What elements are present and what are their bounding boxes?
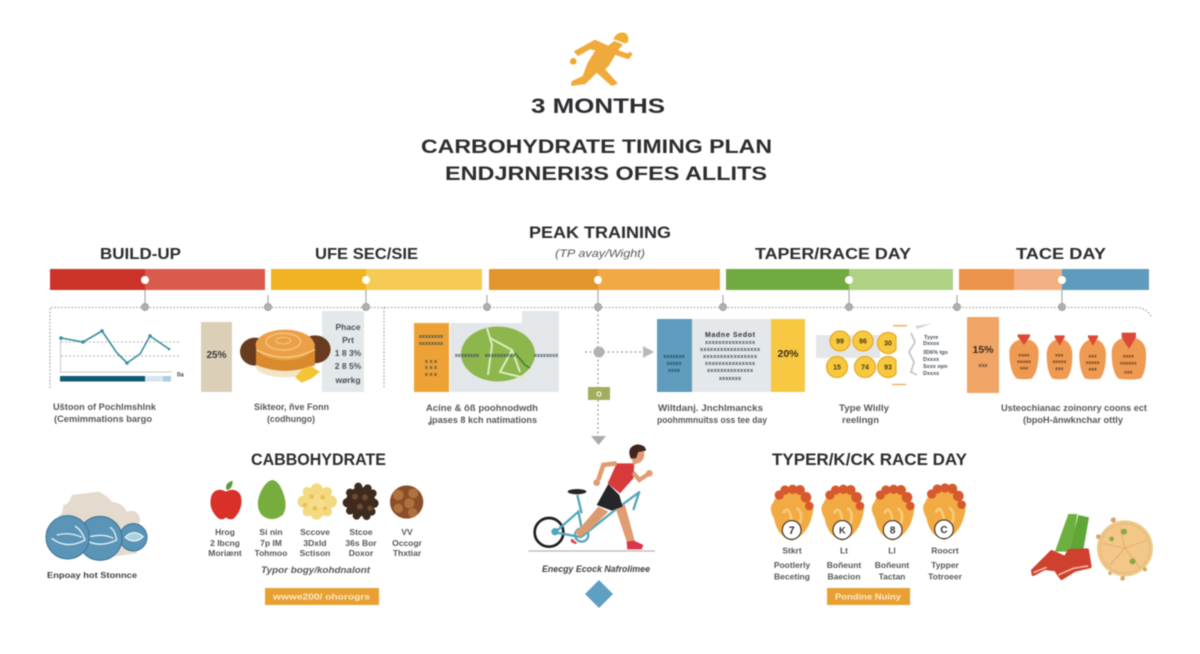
icon: coins: 99 [836,338,844,346]
panel: 20 percent: xxxx [668,368,681,374]
icon: coins: 3D6% tgs [923,350,948,356]
panel: 20 percent: Madne Sedot [705,332,756,339]
badge labels: Lt [840,546,848,556]
panel: peak training plate: xxxxxxxx [419,341,444,347]
icon: coins: Dxxxx [923,371,940,377]
panel: peak training plate [414,311,559,392]
line chart: 0a [177,372,184,378]
panel: 20 percent: xxxxxxx [719,376,742,382]
icon: brown nuts [390,485,423,519]
title: 3 months: 3 MONTHS [531,95,665,118]
icon: gel bottles: xxx [1020,365,1028,371]
icon: gel bottles: xxxxx [1086,360,1100,366]
caption: second phase: (codhungo) [267,414,315,425]
button: carbohydrate: wwwe200/ ohorogrs [272,592,370,602]
caption: taper: Wiltdanj. Jnchlmancks [658,403,763,414]
title: carbohydrate timing plan: CARBOHYDRATE TIMING PLAN [421,136,772,158]
caption: peak training: ʝpases 8 kch natimations [428,415,537,426]
panel: 20 percent: xxxxx [666,361,683,367]
badge: 8: 8 [890,526,896,537]
food labels: 36s Bor [345,538,377,548]
food labels: 2 Ibcng [210,538,240,548]
panel: peak training plate: x x x [425,372,438,378]
panel: 20 percent [657,319,805,392]
food labels [208,527,423,558]
badge labels: Tactan [879,572,905,582]
badge: C [923,483,966,540]
panel: 15 percent: 15% [972,344,994,356]
icon: runner with bicycle [528,444,655,551]
badge labels: Typper [931,560,960,570]
panel: 20 percent: xxxxxxxxxxxxxxxxxx [700,347,761,353]
icon: gel bottles: xxx [1088,367,1097,373]
flow arrows: O [596,392,602,398]
caption: peak training [426,403,538,426]
panel: phase details: wørkg [334,375,361,385]
caption: blue discs: Enpoay hot Stonnce [47,570,137,580]
timeline connectors and nodes [50,290,1151,388]
badge labels: Ll [888,546,896,556]
badge: 8 [872,485,915,541]
icon: coins: 15 [833,364,841,372]
caption: taper [657,403,768,426]
phase heading: peak training: PEAK TRAINING [529,224,671,242]
panel: peak training plate: x x x [425,359,438,365]
food labels: Thxtiar [393,548,422,558]
food labels: Doxor [349,548,374,558]
line chart [59,329,184,382]
badge labels: Boñeunt [827,560,861,570]
badge labels: Boñeunt [875,560,909,570]
badge: 7 [771,485,814,541]
caption: race day [1001,403,1148,426]
food labels: 7p IM [260,538,282,548]
caption: race day: Usteochianac zoinonry coons ect [1001,403,1148,414]
phase heading: second phase: UFE SEC/SIE [315,246,418,263]
food labels: Tohmoo [255,548,287,558]
panel: phase details [322,311,364,392]
phase heading: build-up: BUILD-UP [100,246,181,263]
panel: phase details: 1 8 3% [335,348,362,358]
icon: gel bottles: xxx [1088,353,1097,359]
panel: peak training plate: xxxxxxxx [455,353,480,359]
badge labels: Baecion [827,572,861,582]
badge: K [821,485,864,541]
panel: peak training plate: xxxxxxxx [534,353,559,359]
icon: blue diamond [585,580,613,608]
badge: K: K [839,525,846,535]
caption: runner: Enecgy Ecock Nafrolimee [542,564,650,574]
caption: second phase [254,402,329,425]
caption: build-up [53,402,157,425]
badge labels [774,546,963,582]
phase heading: race day: TACE DAY [1016,246,1107,263]
food icons [210,480,423,520]
timeline bar [50,269,1149,290]
icon: coins: Sxxx opn [923,364,948,370]
panel: 15 percent [967,317,999,393]
badge: 7: 7 [789,525,795,537]
heading: carbohydrate foods: CABBOHYDRATE [251,450,386,469]
panel: phase details: Phace [335,322,361,332]
icon: coins: 74 [861,364,869,372]
badge labels: Beceting [774,572,810,582]
panel: 20 percent: 20% [777,348,799,360]
icon: gel bottles: xxx [1055,352,1064,358]
panel: 20 percent: xxxxxxxxxxxxxx [707,368,754,374]
button: race day [827,588,910,605]
flame badges [771,483,966,541]
icon: coins: 30 [884,340,892,348]
subtitle: ENDJRNERI3S OFES ALLITS [445,164,767,185]
badge labels: Pootlerly [774,560,810,570]
phase subheading: peak training: (TP avay/Wight) [555,248,645,260]
panel: 15 percent: xxx [978,363,989,369]
panel: phase details: 2 8 5% [335,361,362,371]
panel: peak training plate: xxxxxxxx [419,334,444,340]
icon: coins: Tyyre [924,335,938,341]
caption: build-up: (Cemimmations bargo [54,414,152,425]
flow arrows [585,310,654,445]
caption: peak training: Acine & ôß poohnodwdh [426,403,538,414]
icon: gel bottles: xxxx [1018,352,1030,358]
button: race day: Pondine Nuiny [835,592,901,602]
badge labels: Totroeer [928,572,963,582]
icon: gel bottles: xxxxx [1017,359,1031,365]
icon: cake [240,330,331,383]
icon: round pie [1096,517,1153,581]
icon: gel bottles: xxxx [1123,354,1134,360]
phase heading: taper race day: TAPER/RACE DAY [755,246,912,263]
panel: 20 percent: xxxxxxxxxxxxxxxx [703,354,758,360]
food labels: Occogr [392,538,423,548]
panel: 25 percent: 25% [206,350,227,361]
food labels: 3Dxld [303,538,327,548]
icon: gel bottles: xxx [1055,366,1064,372]
food labels: Moriænt [208,548,242,558]
caption: second phase: Sikteor, ñve Fonn [254,402,329,413]
icon: apple [210,481,241,519]
food labels: VV [401,527,413,537]
caption: type [839,403,890,426]
icon: coins: Dxxsx [923,341,940,347]
panel: 20 percent: xxxxxxxxxxxxxxx [705,361,756,367]
icon: running figure [570,33,632,85]
heading: race day foods: TYPER/K/CK RACE DAY [772,450,968,469]
caption: race day: (bpoH-ânwknchar ottly [1023,415,1124,426]
icon: gel bottles: xxxxx [1052,359,1066,365]
icon: gel bottles: xxxxxx [1120,361,1137,367]
icon: coins: 93 [884,364,892,372]
button: carbohydrate [265,588,379,605]
food labels: Sccove [300,527,330,537]
icon: green fruit [258,480,286,519]
panel: 25 percent [201,322,232,392]
icon: blue discs with cloud [46,492,147,560]
food labels: Stcoe [349,527,373,537]
icon: gel bottles [1009,333,1146,380]
icon: coins [816,324,948,384]
food labels: Hrog [215,527,235,537]
icon: coins: Dxxxx [923,357,940,363]
caption: taper: poohmmnuitss oss tee day [657,415,768,426]
icon: green socks and shoes [1033,514,1090,578]
panel: phase details: Prt [342,335,354,345]
icon: coins: 96 [859,338,867,346]
panel: peak training plate: xxxxxxxxxx [485,353,516,359]
badge: C: C [940,525,948,536]
food labels: Si nin [259,527,283,537]
icon: gel bottles: xxx [1124,369,1133,375]
icon: yellow grains [298,483,337,520]
note: carbohydrate: Typor bogy/kohdnalont [261,565,371,576]
panel: peak training plate: x x x [425,365,438,371]
icon: dark nuts [343,483,379,520]
caption: build-up: Uštoon of Pochlmshlnk [53,402,157,413]
caption: type: reelingn [842,415,879,426]
panel: 20 percent: xxxxxxxxxxxxxxx [705,340,756,346]
badge labels: Roocrt [931,546,959,556]
badge labels: Stkrt [782,546,802,556]
food labels: Sctison [300,548,330,558]
caption: type: Type Wiılly [839,403,890,414]
panel: 20 percent: xxxxxxx [663,354,686,360]
